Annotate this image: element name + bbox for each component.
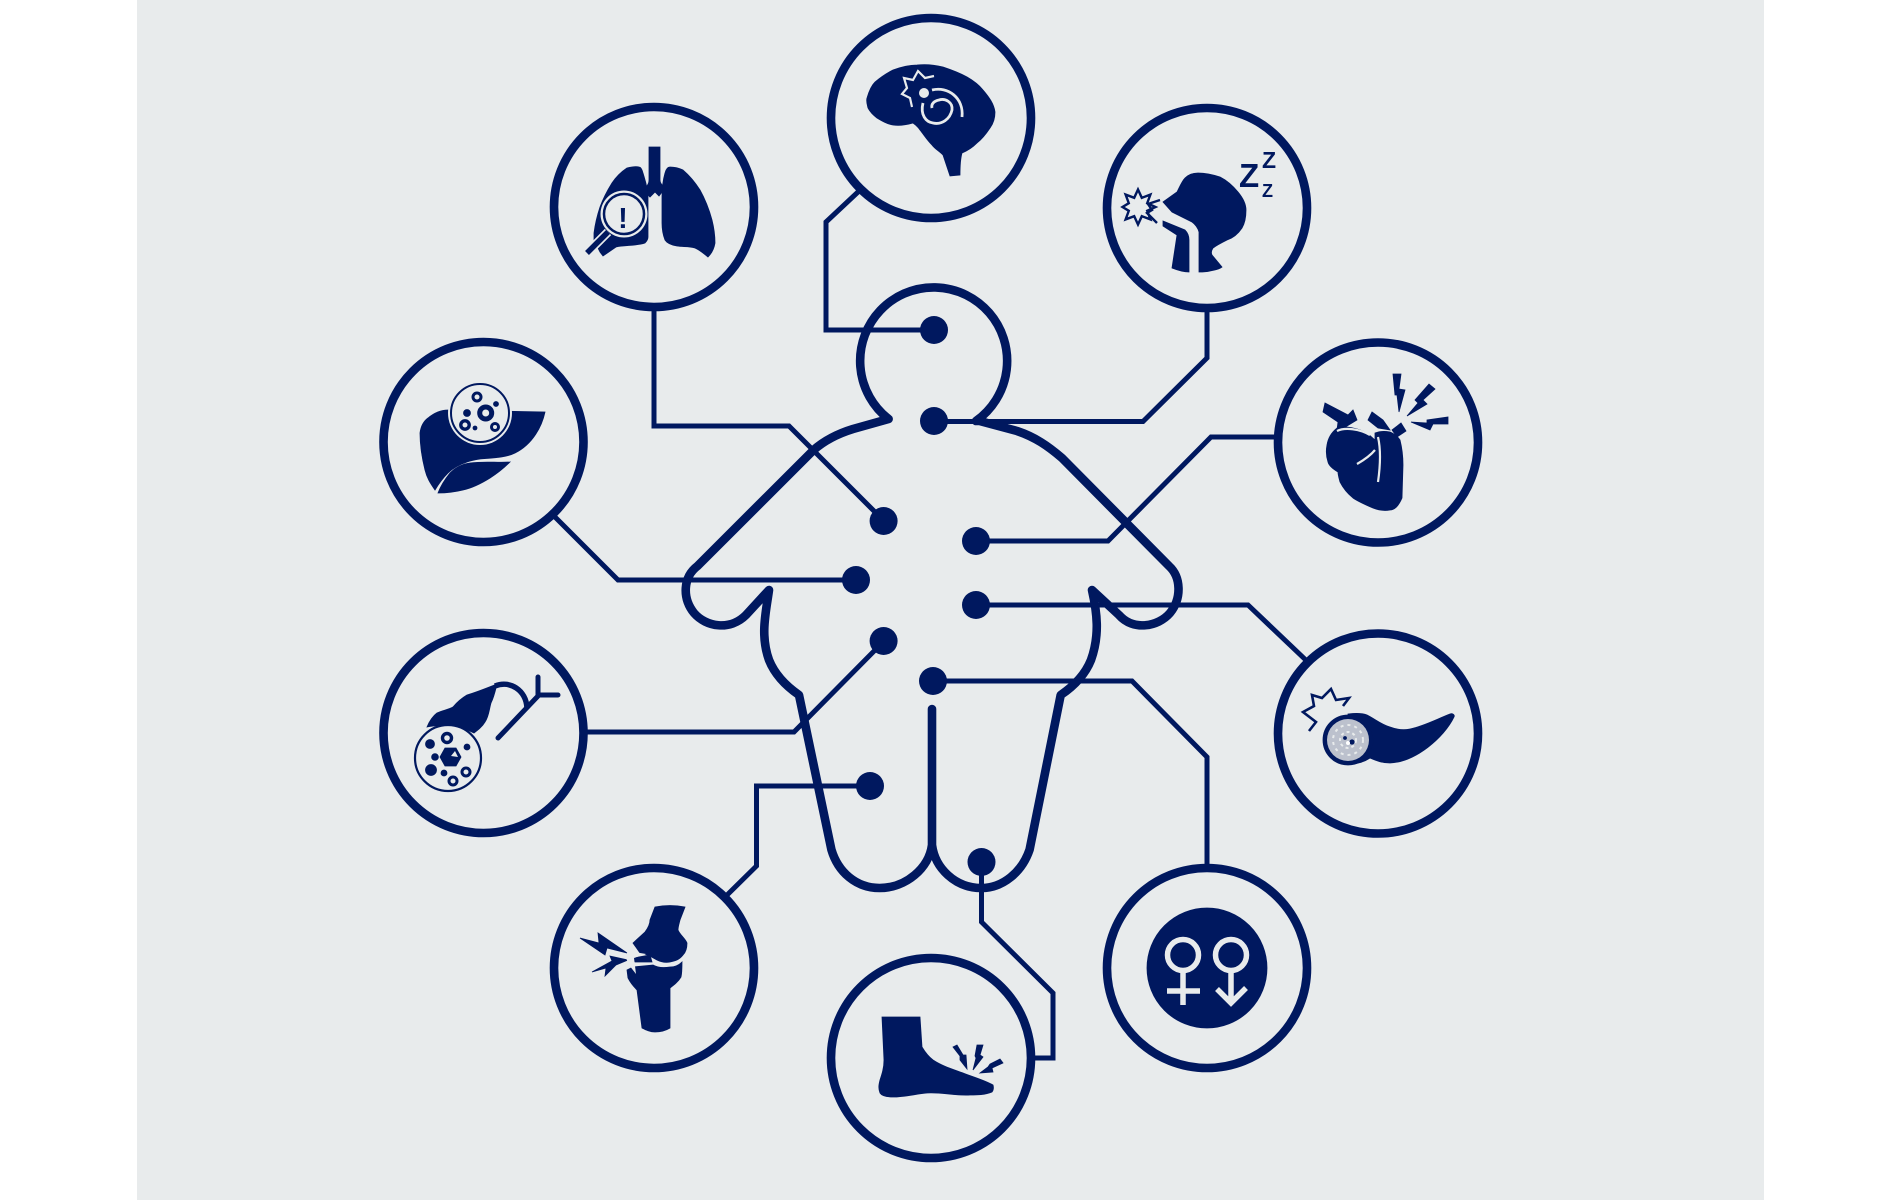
icon: lungs with magnifier xyxy=(587,147,715,257)
panel: liver xyxy=(384,342,584,542)
connector: reproductive xyxy=(933,681,1207,870)
connector: brain xyxy=(826,192,934,330)
connector: liver xyxy=(552,514,856,580)
icon: heart with pain bolts xyxy=(1323,374,1448,510)
anchor dots xyxy=(842,316,996,876)
panel: sleep apnea xyxy=(1107,108,1307,308)
dot: gallbladder xyxy=(870,627,898,655)
panel: heart xyxy=(1278,342,1478,542)
connector: pancreas xyxy=(976,605,1310,664)
dot: knee xyxy=(856,772,884,800)
body outline xyxy=(686,287,1179,888)
icon: fatty liver xyxy=(420,381,545,493)
connector: gallbladder xyxy=(580,641,884,732)
icon: brain with stroke xyxy=(867,65,995,176)
connector: knee xyxy=(723,786,870,899)
dot: liver xyxy=(842,566,870,594)
dot: neck xyxy=(920,407,948,435)
icon: lungs with magnifier: ! xyxy=(618,203,628,235)
connector: heart xyxy=(976,437,1280,541)
icon: knee joint with pain xyxy=(580,906,687,1032)
dot: foot xyxy=(968,848,996,876)
icon: head with snoring: Z xyxy=(1239,157,1259,194)
dot: lungs xyxy=(870,507,898,535)
panel: reproductive xyxy=(1107,868,1307,1068)
icon: gallbladder and stones xyxy=(415,677,558,791)
dot: pancreas xyxy=(962,591,990,619)
panel: brain xyxy=(831,18,1031,218)
panel: pancreas xyxy=(1278,634,1478,834)
panel: knee xyxy=(554,868,754,1068)
connector: lungs xyxy=(654,300,884,521)
connector: foot xyxy=(982,862,1053,1058)
icon: head with snoring xyxy=(1122,147,1276,272)
icon: female and male symbols xyxy=(1147,908,1267,1028)
dot: reproductive xyxy=(919,667,947,695)
icon: head with snoring: Z xyxy=(1262,181,1273,201)
icon: head with snoring: Z xyxy=(1262,147,1276,173)
panel: lungs xyxy=(554,107,754,307)
dot: head xyxy=(920,316,948,344)
icon: foot with pain xyxy=(879,1017,1003,1097)
connector: sleep apnea xyxy=(934,300,1207,422)
connector lines xyxy=(552,192,1310,1058)
panel: gallbladder xyxy=(384,633,584,833)
dot: heart xyxy=(962,527,990,555)
icon: pancreas xyxy=(1303,689,1454,765)
panel: foot xyxy=(831,958,1031,1158)
